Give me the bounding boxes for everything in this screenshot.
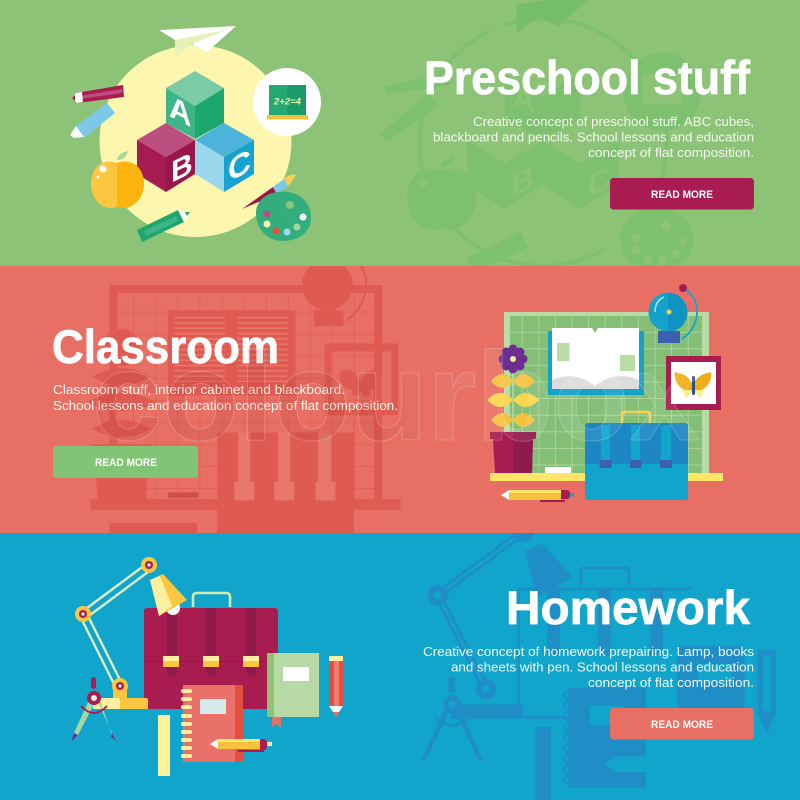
illustration: homework composition — [71, 557, 343, 776]
icon: maroon pencil — [72, 85, 124, 103]
panel: homework — [0, 521, 800, 800]
icon: spiral notebook — [181, 685, 243, 762]
illustration: preschool composition — [70, 26, 321, 242]
icon: yellow pen — [210, 739, 272, 752]
text block: preschool description: Creative concept of preschool stuff. ABC cubes, — [473, 115, 754, 129]
blackboard grid — [504, 312, 709, 473]
button: read more — [610, 708, 754, 740]
ghost illustration: homework — [424, 521, 776, 800]
ghost illustration: classroom — [87, 266, 400, 533]
icon: ABC cubes: C — [228, 142, 251, 190]
icon: paintbrush — [242, 174, 296, 209]
text block: homework description: Creative concept of homework prepairing. Lamp, books — [423, 645, 754, 659]
button: read more: READ MORE — [651, 189, 713, 201]
text block: preschool description — [433, 115, 754, 160]
shelf and chalk — [490, 467, 723, 481]
icon: yellow pencil — [501, 490, 574, 502]
text block: classroom description — [53, 383, 398, 413]
panel: classroom — [0, 266, 800, 533]
text block: classroom description: School lessons and education concept of flat composition. — [53, 399, 398, 413]
text block: classroom description: Classroom stuff, interior cabinet and blackboard. — [53, 383, 345, 397]
icon: ABC cubes — [137, 71, 254, 192]
icon: open book — [548, 328, 644, 395]
icon: ABC cubes: B — [171, 145, 193, 190]
text block: homework description: and sheets with pen. School lessons and education — [451, 660, 754, 674]
icon: framed butterfly — [666, 356, 721, 410]
panel: preschool stuff — [0, 0, 800, 274]
icon: flower pot — [487, 344, 539, 473]
button: read more — [610, 178, 754, 210]
icon: green pencil — [137, 210, 190, 242]
icon: blackboard badge: 2+2=4 — [273, 96, 302, 108]
icon: blackboard badge — [253, 68, 321, 136]
ghost illustration: preschool: A — [513, 77, 535, 120]
icon: school bell — [648, 284, 697, 343]
ghost illustration: preschool: C — [588, 158, 611, 204]
text block: homework description: concept of flat composition. — [588, 676, 754, 690]
illustration: classroom composition — [487, 284, 723, 502]
icon: ABC cubes: A — [169, 88, 191, 134]
heading: Homework: Homework — [506, 581, 751, 634]
text block: preschool description: concept of flat composition. — [588, 146, 754, 160]
ghost illustration: preschool: B — [511, 158, 534, 204]
heading: Classroom: Classroom — [52, 320, 279, 373]
icon: compass — [71, 677, 117, 742]
text block: homework description — [423, 645, 754, 690]
yellow circle — [100, 45, 292, 237]
button: read more — [53, 446, 198, 478]
icon: blue pencil — [70, 103, 115, 138]
watermark: colourbox: colourbox — [92, 326, 700, 467]
icon: ruler — [158, 715, 170, 776]
icon: red pencil — [329, 656, 343, 718]
icon: desk lamp — [75, 557, 187, 709]
heading: Preschool stuff: Preschool stuff — [424, 51, 750, 104]
icon: palette — [256, 192, 311, 241]
icon: paper plane — [159, 26, 236, 57]
button: read more: READ MORE — [651, 719, 713, 731]
icon: blue briefcase — [585, 412, 688, 500]
button: read more: READ MORE — [95, 457, 157, 469]
icon: maroon briefcase — [144, 593, 278, 709]
ghost illustration: preschool — [380, 0, 701, 274]
text block: preschool description: blackboard and pencils. School lessons and education — [433, 130, 754, 144]
icon: green notebook — [267, 653, 319, 727]
icon: apple — [91, 151, 144, 208]
